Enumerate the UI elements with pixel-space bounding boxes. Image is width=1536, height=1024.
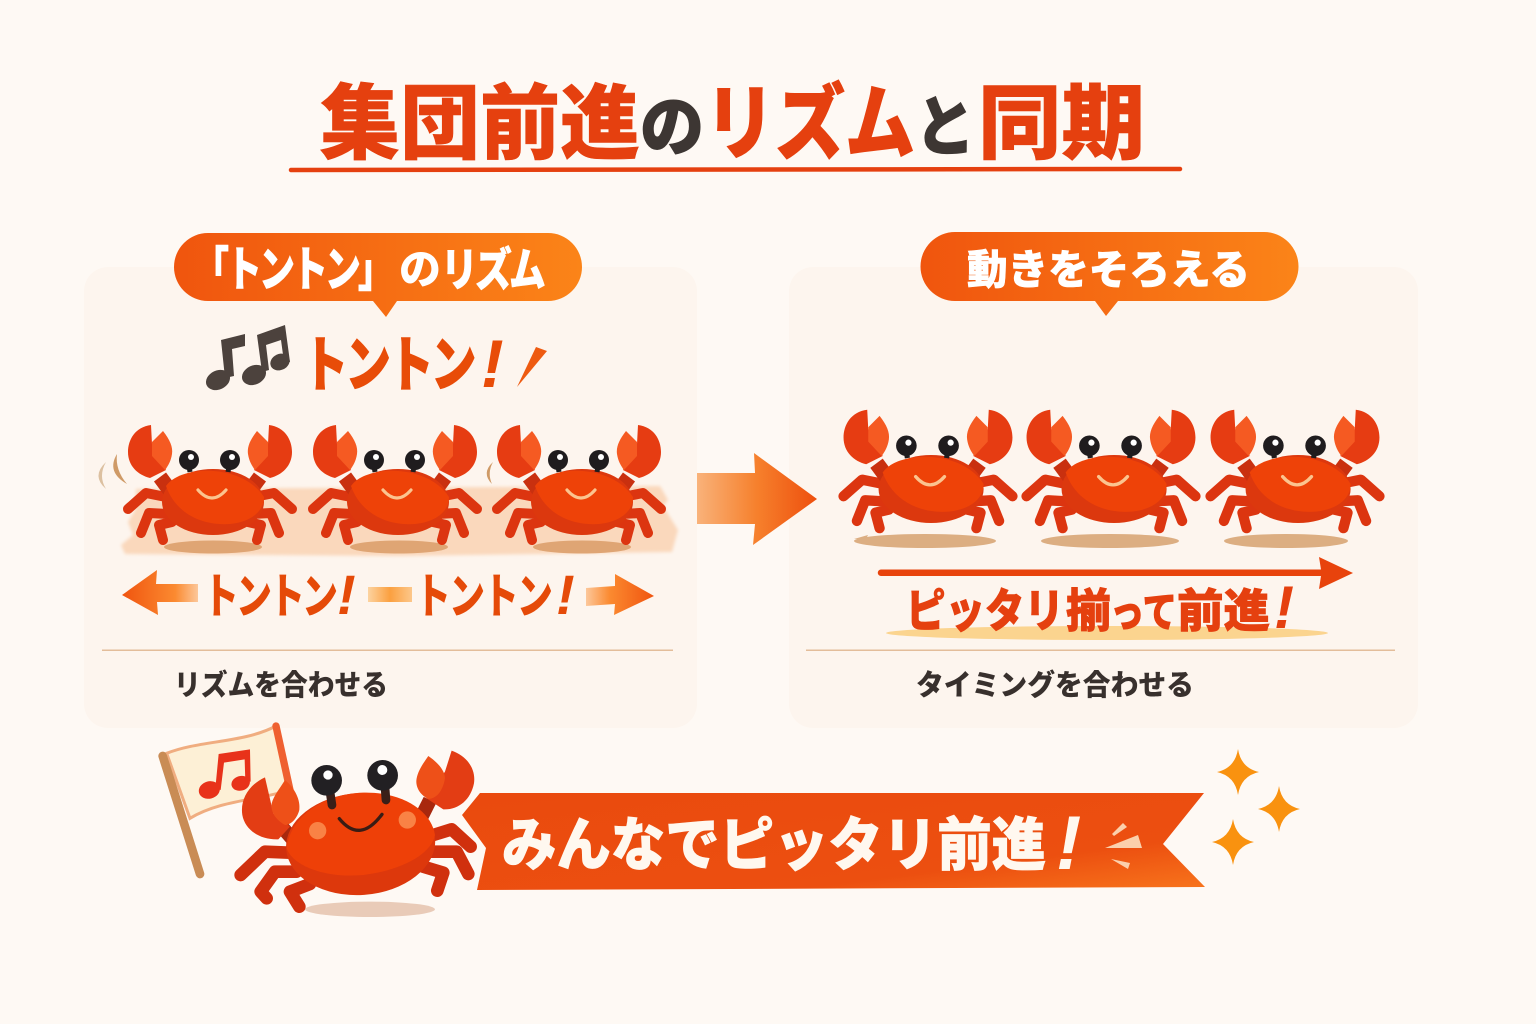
shadows under crabs	[164, 540, 631, 554]
slogan: !	[1274, 574, 1294, 641]
heading pill: rhythm: 「トントン」	[193, 243, 391, 296]
crab 1	[128, 425, 292, 540]
banner text: !	[1056, 801, 1081, 886]
banner	[462, 793, 1205, 890]
dash	[368, 587, 412, 602]
accent stroke	[517, 347, 547, 387]
heading pill: rhythm: リズム	[441, 244, 545, 296]
title: リズム	[705, 79, 915, 170]
icon: flag note	[197, 749, 252, 801]
caption: rhythm: リズムを合わせる	[174, 668, 388, 702]
panel: rhythm	[84, 233, 697, 728]
divider	[102, 650, 673, 651]
title: 同期	[978, 79, 1145, 170]
heading pill: timing	[920, 232, 1298, 316]
big arrow	[697, 453, 817, 545]
title: 集団前進	[320, 79, 640, 170]
tonton label 2: トントン	[415, 570, 552, 623]
heading pill: rhythm	[174, 233, 582, 317]
tonton exclamation: !	[481, 326, 504, 402]
panel: timing	[789, 232, 1418, 728]
slogan	[906, 574, 1294, 641]
slogan: って	[1110, 589, 1177, 636]
left arrow	[122, 570, 198, 615]
right arrow	[586, 574, 654, 615]
flag	[163, 726, 290, 874]
mascot crab	[241, 751, 474, 917]
motion marks	[98, 454, 493, 489]
crab 1	[844, 410, 1012, 528]
tonton label 1: トントン	[203, 570, 337, 623]
shadows under crabs	[854, 534, 1348, 548]
title underline	[291, 169, 1180, 170]
tonton label 2: !	[556, 563, 575, 626]
crab 2	[313, 425, 477, 540]
caption: timing: タイミングを合わせる	[916, 668, 1194, 702]
forward arrow	[878, 557, 1353, 589]
slogan: ピッタリ	[906, 585, 1064, 637]
crab 3	[1211, 410, 1379, 528]
crab 3	[497, 425, 661, 540]
crab 2	[1027, 410, 1195, 528]
tonton exclamation: トントン	[303, 333, 474, 400]
brush band	[121, 486, 678, 556]
white leg outline	[430, 828, 472, 874]
slogan: 揃	[1066, 585, 1111, 637]
banner text: みんなでピッタリ前進	[502, 813, 1046, 878]
heading pill: rhythm: の	[399, 246, 441, 293]
title	[320, 79, 1145, 170]
title: の	[640, 90, 704, 164]
heading pill: timing: 動きをそろえる	[967, 247, 1250, 293]
icon: music notes	[203, 325, 292, 394]
tonton label 1: !	[337, 563, 356, 626]
divider	[806, 650, 1395, 651]
slogan: 前進	[1177, 585, 1270, 637]
burst marks	[1105, 823, 1142, 869]
title: と	[915, 90, 975, 164]
sparkles	[1212, 749, 1300, 865]
highlight	[886, 626, 1328, 640]
